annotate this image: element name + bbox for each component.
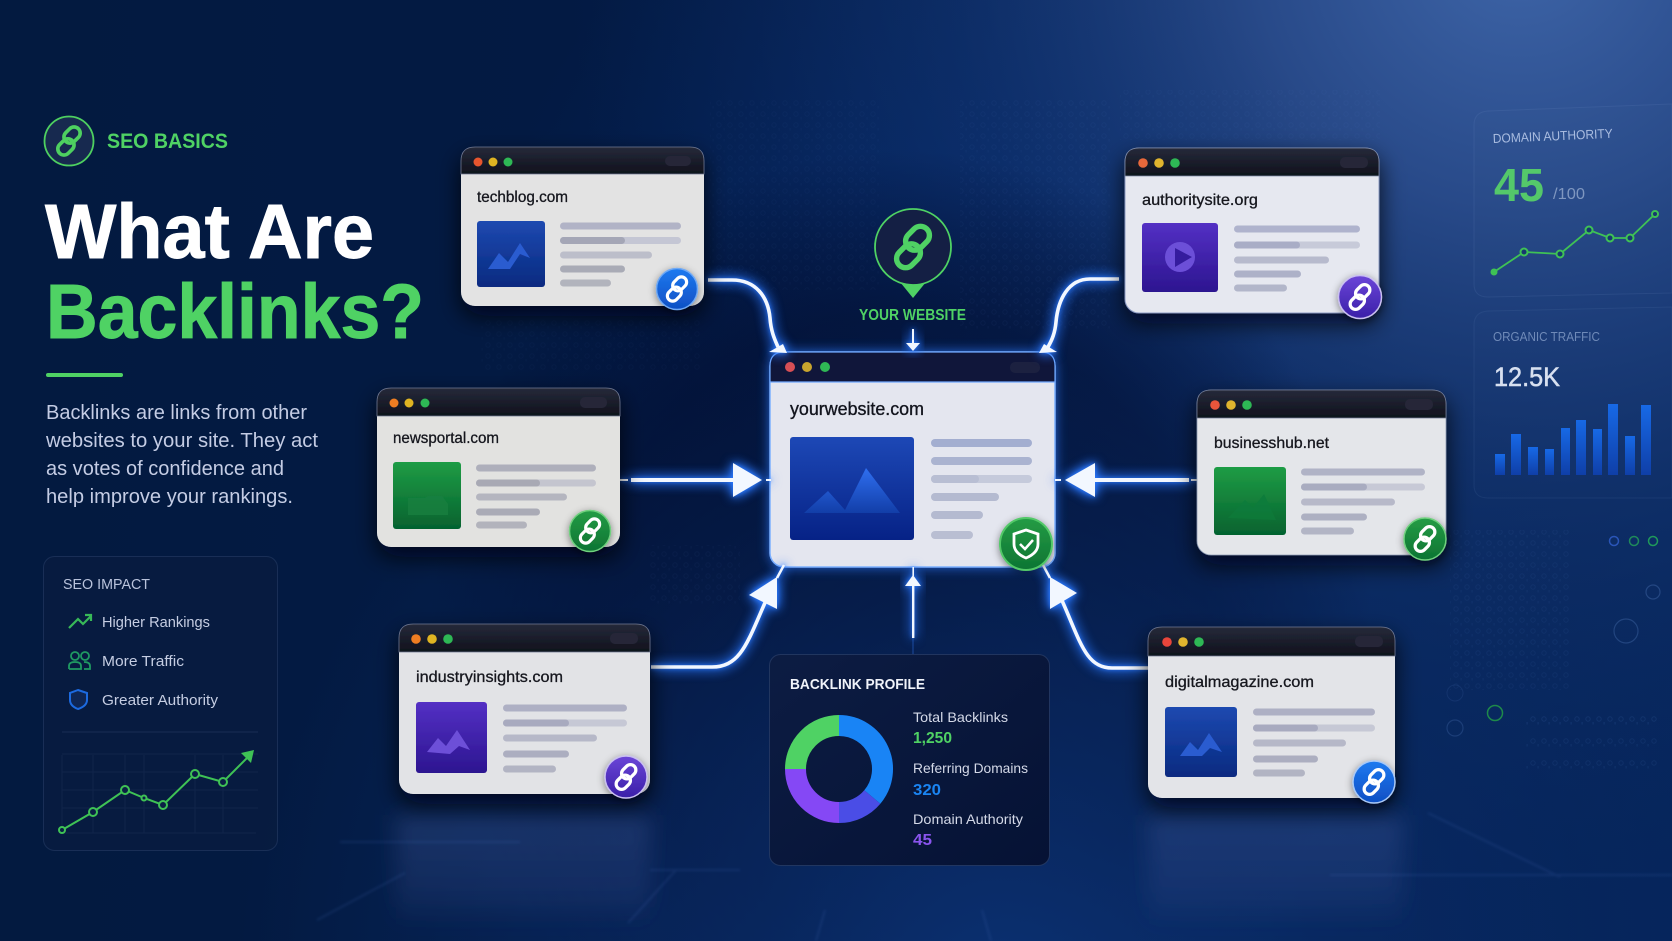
card: businesshub.net: businesshub.net — [1214, 435, 1330, 452]
SEO impact heading: SEO IMPACT — [63, 577, 150, 593]
organic traffic bar chart — [1495, 404, 1651, 475]
panel: SEO impact — [44, 556, 278, 850]
stat: domain authority — [913, 811, 1023, 849]
domain authority line chart — [1492, 211, 1658, 274]
title divider — [46, 373, 123, 377]
badge: digitalmagazine link — [1353, 761, 1395, 803]
panel: domain authority — [1474, 104, 1672, 297]
arrow: pin to your website — [906, 329, 920, 351]
badge: industryinsights link — [605, 756, 647, 798]
organic traffic heading: ORGANIC TRAFFIC — [1493, 329, 1600, 344]
title: What Are — [45, 189, 374, 275]
title — [45, 189, 424, 355]
badge: techblog link — [656, 268, 698, 310]
arrow: techblog to your website — [708, 280, 787, 353]
badge: verified shield — [1000, 518, 1052, 570]
panel: organic traffic — [1474, 307, 1672, 498]
intro paragraph: help improve your rankings. — [46, 485, 293, 508]
domain authority score: 45 — [1494, 159, 1544, 211]
eyebrow: SEO basics: SEO BASICS — [107, 130, 228, 153]
stat: domain authority: 45 — [913, 832, 932, 849]
card: industryinsights.com — [399, 624, 650, 794]
card: newsportal.com — [377, 388, 620, 547]
card: techblog.com — [461, 147, 704, 306]
badge: newsportal link — [570, 510, 610, 552]
impact: higher rankings: Higher Rankings — [102, 615, 210, 631]
arrow: digitalmagazine to your website — [1043, 565, 1148, 668]
growth line chart — [59, 750, 258, 833]
card: authoritysite.org: authoritysite.org — [1142, 192, 1258, 209]
icon: trend up — [69, 615, 91, 628]
badge: businesshub link — [1404, 518, 1446, 560]
badge: authoritysite link — [1338, 276, 1382, 318]
icon: SEO basics link badge — [44, 116, 94, 166]
stat: referring domains: Referring Domains — [913, 760, 1028, 776]
intro paragraph: websites to your site. They act — [45, 429, 318, 452]
arrow: authoritysite to your website — [1039, 279, 1119, 353]
intro paragraph: Backlinks are links from other — [46, 401, 307, 424]
domain authority heading: DOMAIN AUTHORITY — [1492, 126, 1613, 146]
stat: referring domains — [913, 760, 1028, 799]
stat: domain authority: Domain Authority — [913, 811, 1023, 827]
card: newsportal.com: newsportal.com — [393, 430, 499, 447]
backlink profile heading: BACKLINK PROFILE — [790, 676, 925, 693]
title: Backlinks? — [46, 269, 424, 355]
panel: backlink profile — [770, 654, 1050, 866]
pin: your website — [875, 209, 951, 298]
card: industryinsights.com: industryinsights.com — [416, 669, 563, 686]
card: digitalmagazine.com: digitalmagazine.com — [1165, 674, 1314, 691]
arrow: backlink profile to your website — [905, 567, 921, 638]
donut chart — [796, 726, 883, 812]
stat: total backlinks — [913, 709, 1008, 747]
stat: total backlinks: Total Backlinks — [913, 709, 1008, 725]
card: digitalmagazine.com — [1148, 627, 1395, 798]
icon: shield — [70, 690, 87, 709]
stat: total backlinks: 1,250 — [913, 730, 952, 747]
your website label: YOUR WEBSITE — [859, 307, 966, 324]
card: businesshub.net — [1197, 390, 1446, 555]
arrow: newsportal to your website — [620, 463, 771, 497]
arrow: industryinsights to your website — [651, 565, 784, 667]
card: yourwebsite.com: yourwebsite.com — [790, 398, 924, 419]
impact: more traffic: More Traffic — [102, 654, 184, 670]
card: yourwebsite.com — [770, 352, 1055, 567]
icon: people — [69, 652, 90, 669]
card: techblog.com: techblog.com — [477, 189, 568, 206]
intro paragraph: as votes of confidence and — [46, 457, 284, 480]
score suffix: /100 — [1553, 186, 1585, 203]
card: authoritysite.org — [1125, 148, 1379, 313]
impact: greater authority: Greater Authority — [102, 693, 219, 709]
intro paragraph — [45, 401, 318, 508]
stat: referring domains: 320 — [913, 782, 941, 799]
organic traffic value: 12.5K — [1494, 362, 1560, 392]
arrow: businesshub to your website — [1055, 463, 1198, 497]
